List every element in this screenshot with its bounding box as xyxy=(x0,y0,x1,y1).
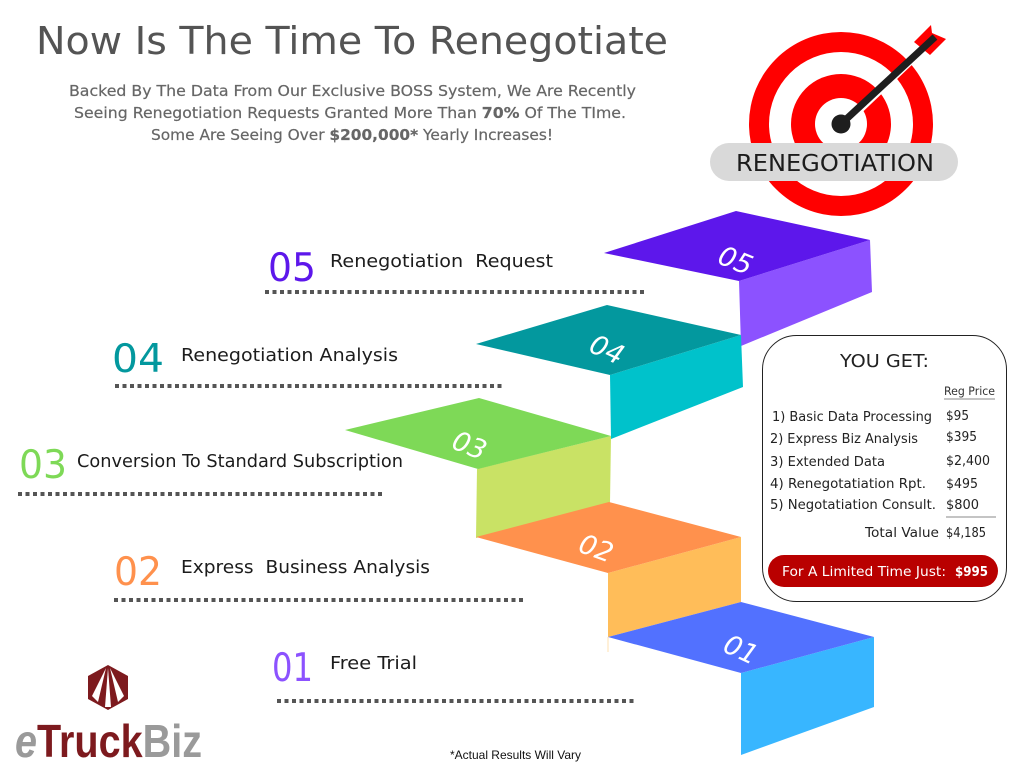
item list with prices: 3) Extended Data xyxy=(770,454,885,470)
item list with prices xyxy=(770,408,990,513)
item list with prices: 1) Basic Data Processing xyxy=(772,409,932,425)
item list with prices: $95 xyxy=(946,408,969,424)
step 05 block xyxy=(604,211,872,346)
panel: you get pricing xyxy=(762,336,1006,602)
total value: Total Value xyxy=(864,525,939,541)
intro text block xyxy=(69,82,636,144)
step 01 block: 01 xyxy=(718,629,763,672)
step 03 label: 03 xyxy=(19,443,67,488)
step 01 label xyxy=(272,646,637,701)
step 02 label xyxy=(114,550,525,600)
total value: $4,185 xyxy=(946,525,986,541)
limited time offer button xyxy=(768,555,998,587)
total value xyxy=(864,525,986,541)
item list with prices: $2,400 xyxy=(946,453,990,469)
footnote: *Actual Results Will Vary xyxy=(450,748,581,762)
step 03 block: 03 xyxy=(447,425,491,467)
icon: target with arrow and renegotiation badge: RENEGOTIATION xyxy=(736,151,934,177)
step 03 label: Conversion To Standard Subscription xyxy=(77,451,403,472)
step 02 block xyxy=(476,502,741,652)
step 05 label xyxy=(265,246,645,292)
limited time offer button: For A Limited Time Just: xyxy=(782,565,946,580)
step 01 label: 01 xyxy=(272,646,313,691)
step 01 label: Free Trial xyxy=(330,653,417,674)
intro text block: Backed By The Data From Our Exclusive BOSS System, We Are Recently xyxy=(69,82,636,100)
logo: eTruckBiz: eTruckBiz xyxy=(15,715,202,767)
limited time offer button: $995 xyxy=(955,565,988,580)
item list with prices: $800 xyxy=(946,497,979,513)
step 05 label: Renegotiation Request xyxy=(330,251,553,272)
icon: target with arrow and renegotiation badge xyxy=(710,25,958,216)
step 03 label xyxy=(18,443,403,494)
logo: eTruckBiz xyxy=(15,665,202,767)
item list with prices: 5) Negotatiation Consult. xyxy=(770,497,936,513)
step 04 block xyxy=(476,305,743,439)
step 04 label xyxy=(112,337,503,386)
title: Now Is The Time To Renegotiate xyxy=(36,19,668,63)
step 03 block xyxy=(345,398,611,538)
item list with prices: 2) Express Biz Analysis xyxy=(770,431,918,447)
item list with prices: 4) Renegotatiation Rpt. xyxy=(770,476,926,492)
step 04 label: 04 xyxy=(112,337,164,382)
intro text block: Seeing Renegotiation Requests Granted More Than 70% Of The TIme. xyxy=(74,104,626,122)
regular price column header: Reg Price xyxy=(944,384,995,398)
step 02 label: Express Business Analysis xyxy=(181,557,430,578)
step 01 block xyxy=(608,602,874,755)
item list with prices: $495 xyxy=(946,476,978,492)
item list with prices: $395 xyxy=(946,429,977,445)
step 04 block: 04 xyxy=(584,329,629,372)
panel heading: YOU GET: xyxy=(839,351,929,372)
step 04 label: Renegotiation Analysis xyxy=(181,345,398,366)
step 05 label: 05 xyxy=(268,246,316,291)
step 02 block: 02 xyxy=(574,529,617,569)
step 02 label: 02 xyxy=(114,550,162,595)
step 05 block: 05 xyxy=(713,240,757,282)
intro text block: Some Are Seeing Over $200,000* Yearly Increases! xyxy=(151,126,553,144)
